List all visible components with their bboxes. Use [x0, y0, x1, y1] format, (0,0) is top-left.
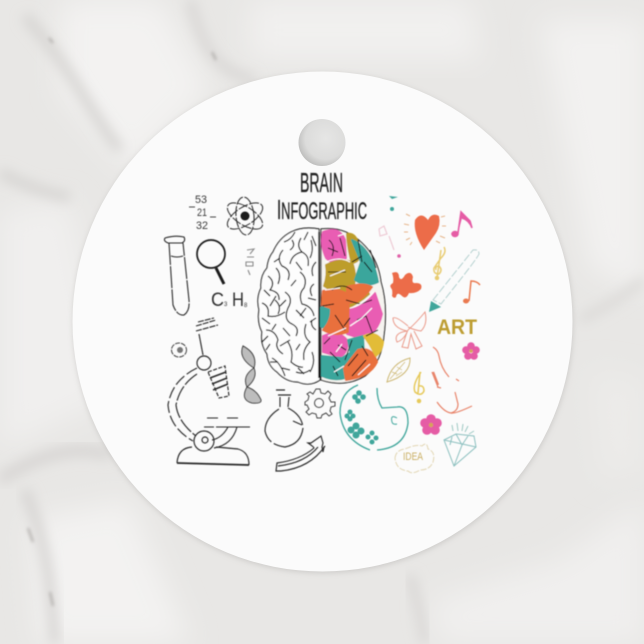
subtraction sum — [189, 194, 216, 232]
teal marks — [389, 196, 398, 211]
icon: yellow treble clef — [434, 247, 445, 280]
brain — [258, 228, 385, 384]
icon: orange splat — [390, 272, 421, 298]
icon: painter palette — [340, 385, 408, 450]
punched hole — [298, 119, 346, 166]
icon: DNA helix — [242, 346, 261, 403]
icon: orange guitar sketch — [432, 347, 472, 413]
arrow — [276, 436, 325, 471]
icon: small treble clef — [414, 372, 424, 402]
icon: ribbon bow — [393, 312, 426, 349]
ART lettering: ART — [437, 316, 477, 339]
small formula note — [246, 249, 254, 275]
icon: pink music note — [451, 212, 472, 237]
icon: diamond — [444, 423, 476, 466]
icon: teal pencil — [429, 250, 479, 312]
icon: magnifying glass — [197, 240, 225, 284]
subtraction sum: 32 — [196, 220, 208, 232]
chemical formula: 8 — [244, 303, 248, 309]
icon: pink flower — [462, 342, 480, 360]
icon: orange music note — [463, 281, 480, 304]
left hemisphere — [258, 228, 320, 384]
icon: leaf — [387, 358, 410, 382]
icon: heart with rays — [404, 214, 446, 250]
subtraction sum: 53 — [195, 194, 207, 206]
icon: gear — [305, 389, 335, 418]
icon: test tube — [164, 236, 189, 315]
chemical formula: H — [232, 290, 244, 311]
right hemisphere, colored — [321, 229, 385, 383]
chemical formula: 3 — [224, 302, 228, 308]
title — [277, 167, 367, 225]
icon: pink flower large — [420, 414, 442, 435]
icon: coin — [172, 343, 186, 357]
icon: atom — [223, 196, 267, 236]
icon: faint paint brush — [379, 226, 401, 258]
title: BRAIN — [300, 167, 343, 198]
orange lobes — [322, 284, 377, 380]
title: INFOGRAPHIC — [277, 194, 367, 225]
chemical formula — [211, 290, 248, 311]
round white tag — [72, 72, 572, 572]
idea cloud: IDEA — [403, 451, 424, 463]
chemical formula: C — [211, 290, 224, 311]
tag shadow — [73, 73, 573, 573]
subtraction sum: 21 — [197, 207, 207, 219]
icon: microscope — [168, 318, 250, 465]
olive lobes — [324, 234, 369, 309]
idea cloud — [395, 444, 434, 473]
icon: flask — [265, 390, 303, 447]
pink lobes — [322, 230, 382, 357]
yellow lobe — [364, 334, 383, 356]
teal lobes — [321, 240, 378, 379]
